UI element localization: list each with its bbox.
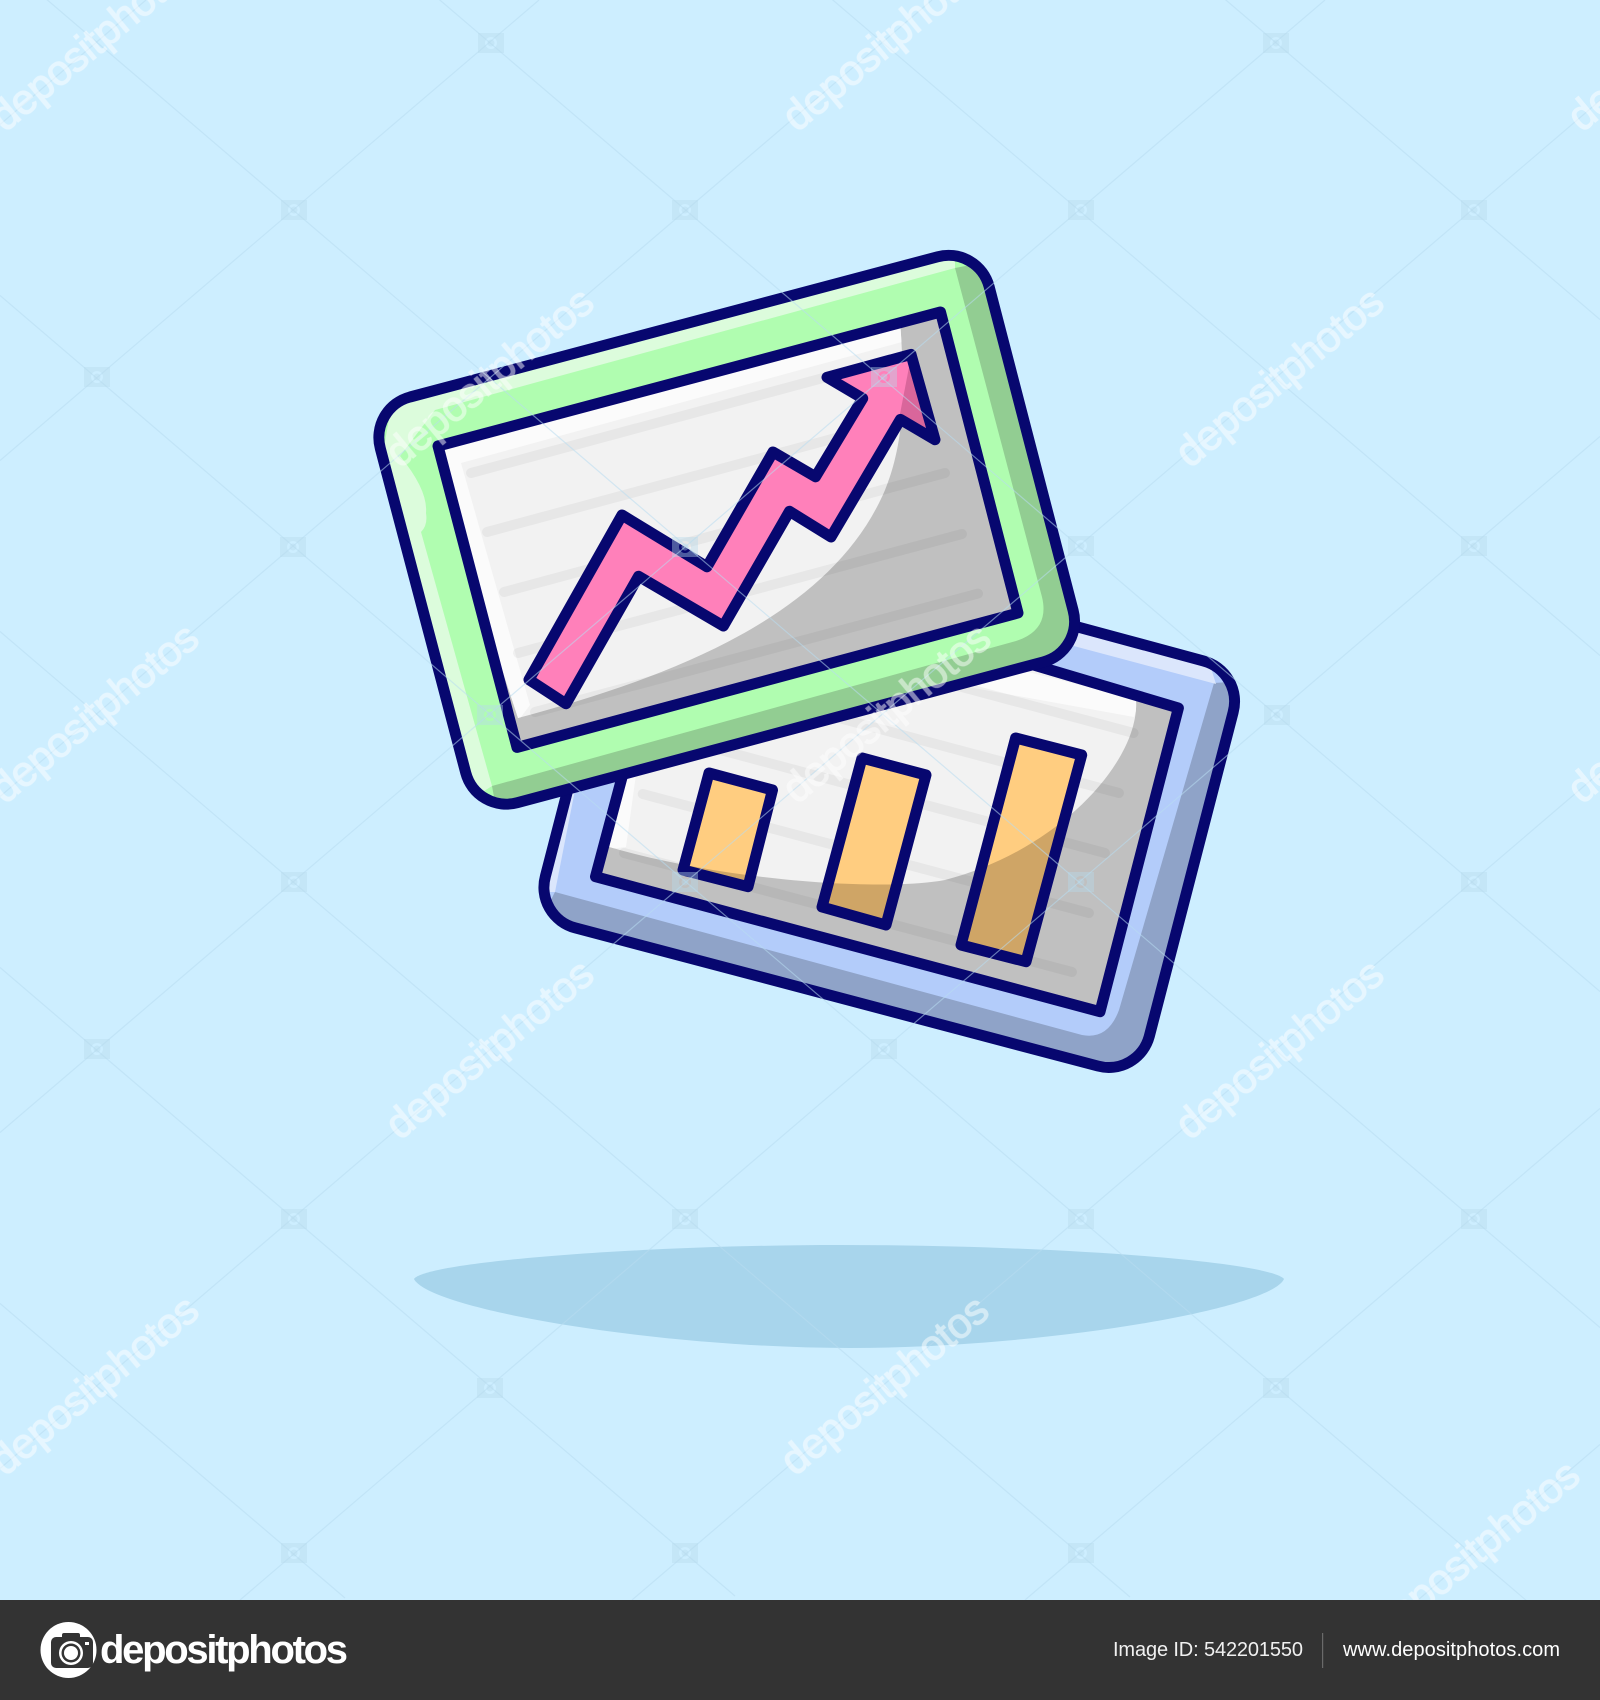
watermark: depositphotos text: depositphotos bbox=[376, 277, 602, 476]
icon: depositphotos camera logo bbox=[40, 1622, 96, 1678]
watermark: depositphotos text: depositphotos bbox=[1166, 949, 1392, 1148]
tablet: green line chart bbox=[370, 235, 1100, 830]
green tablet body bbox=[379, 255, 1075, 804]
blue tablet body bbox=[544, 560, 1235, 1067]
watermark: depositphotos text: depositphotos bbox=[376, 949, 602, 1148]
watermark: depositphotos text: depositphotos bbox=[1166, 277, 1392, 476]
green tablet shading bbox=[385, 260, 1070, 799]
watermark: depositphotos text: depositphotos bbox=[1362, 1450, 1588, 1649]
watermark: camera icons bbox=[84, 33, 1487, 1563]
green screen outline bbox=[438, 312, 1018, 747]
watermark: depositphotos text: depositphotos bbox=[773, 613, 999, 812]
watermark: depositphotos text: depositphotos bbox=[771, 1285, 997, 1484]
footer bar bbox=[0, 1600, 1600, 1700]
tablet: blue bar chart bbox=[538, 622, 1240, 1073]
blue tablet screen bbox=[602, 670, 1172, 1005]
footer divider bbox=[1322, 1633, 1323, 1668]
bar: medium bbox=[822, 758, 926, 925]
blue tablet outline bbox=[544, 560, 1235, 1067]
green tablet outline bbox=[379, 255, 1075, 804]
bar: tall bbox=[961, 738, 1082, 962]
blue screen outline bbox=[596, 560, 1178, 1012]
image id: Image ID: 542201550 bbox=[1113, 1639, 1303, 1661]
bar: short bbox=[683, 773, 772, 887]
website url: www.depositphotos.com bbox=[1342, 1639, 1560, 1661]
green tablet screen bbox=[444, 318, 1012, 740]
rising pink arrow bbox=[529, 354, 935, 704]
logo wordmark: depositphotos bbox=[100, 1628, 348, 1672]
floating shadow bbox=[414, 1245, 1284, 1348]
blue tablet shading bbox=[549, 633, 1230, 1062]
